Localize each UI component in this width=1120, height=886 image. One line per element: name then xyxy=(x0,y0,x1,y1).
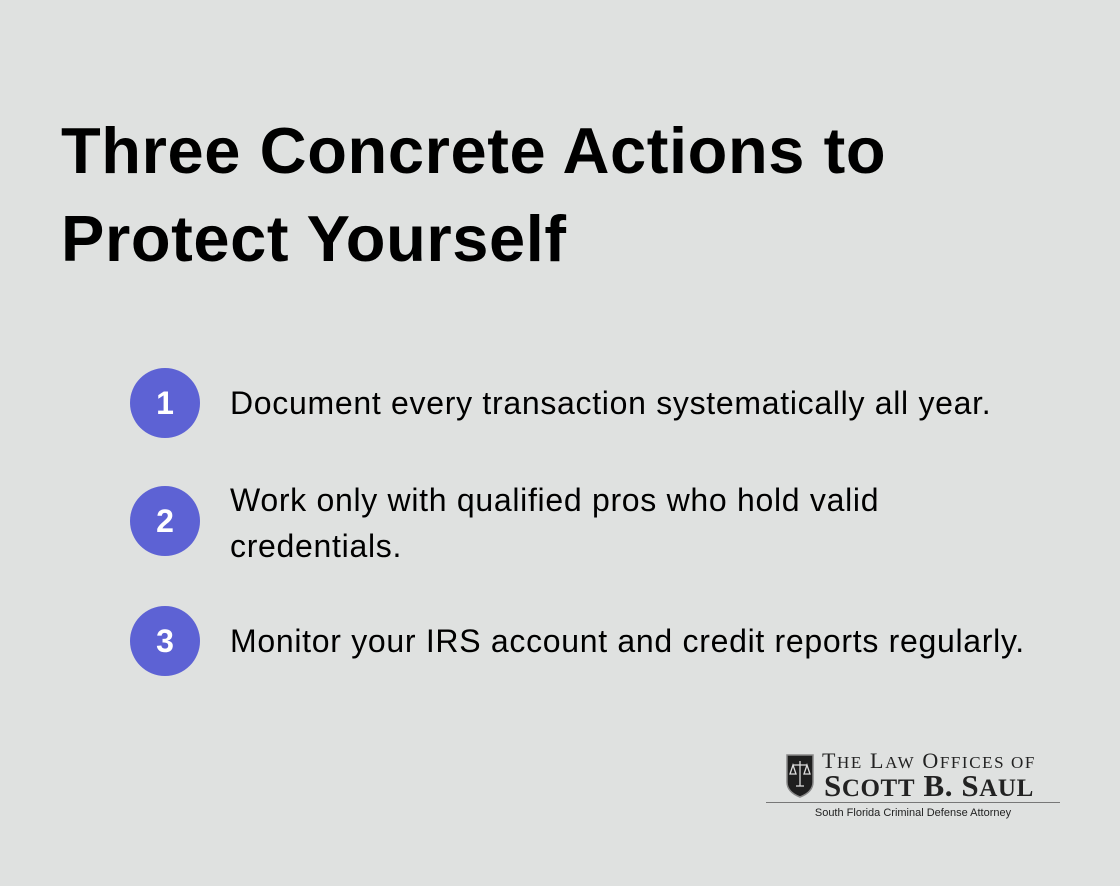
item 2 xyxy=(130,482,879,564)
text 1: Document every transaction systematically all year. xyxy=(230,385,991,421)
icon: shield with scales xyxy=(786,754,814,798)
item 1 xyxy=(130,368,991,438)
text 2: Work only with qualified pros who hold valid xyxy=(230,482,879,518)
logo: South Florida Criminal Defense Attorney xyxy=(815,807,1011,819)
text 3: Monitor your IRS account and credit reports regularly. xyxy=(230,623,1025,659)
title: Three Concrete Actions to xyxy=(61,114,886,187)
title xyxy=(61,114,886,275)
circle 1 xyxy=(130,368,200,438)
circle 1: 1 xyxy=(156,385,174,421)
logo: SCOTT B. SAUL xyxy=(824,768,1034,803)
logo xyxy=(766,748,1060,819)
text 2: credentials. xyxy=(230,528,402,564)
circle 2 xyxy=(130,486,200,556)
circle 2: 2 xyxy=(156,503,174,539)
circle 3: 3 xyxy=(156,623,174,659)
text 2 xyxy=(230,482,879,564)
logo text: THE LAW OFFICES OF xyxy=(822,748,1036,773)
title: Protect Yourself xyxy=(61,202,567,275)
item 3 xyxy=(130,606,1025,676)
circle 3 xyxy=(130,606,200,676)
